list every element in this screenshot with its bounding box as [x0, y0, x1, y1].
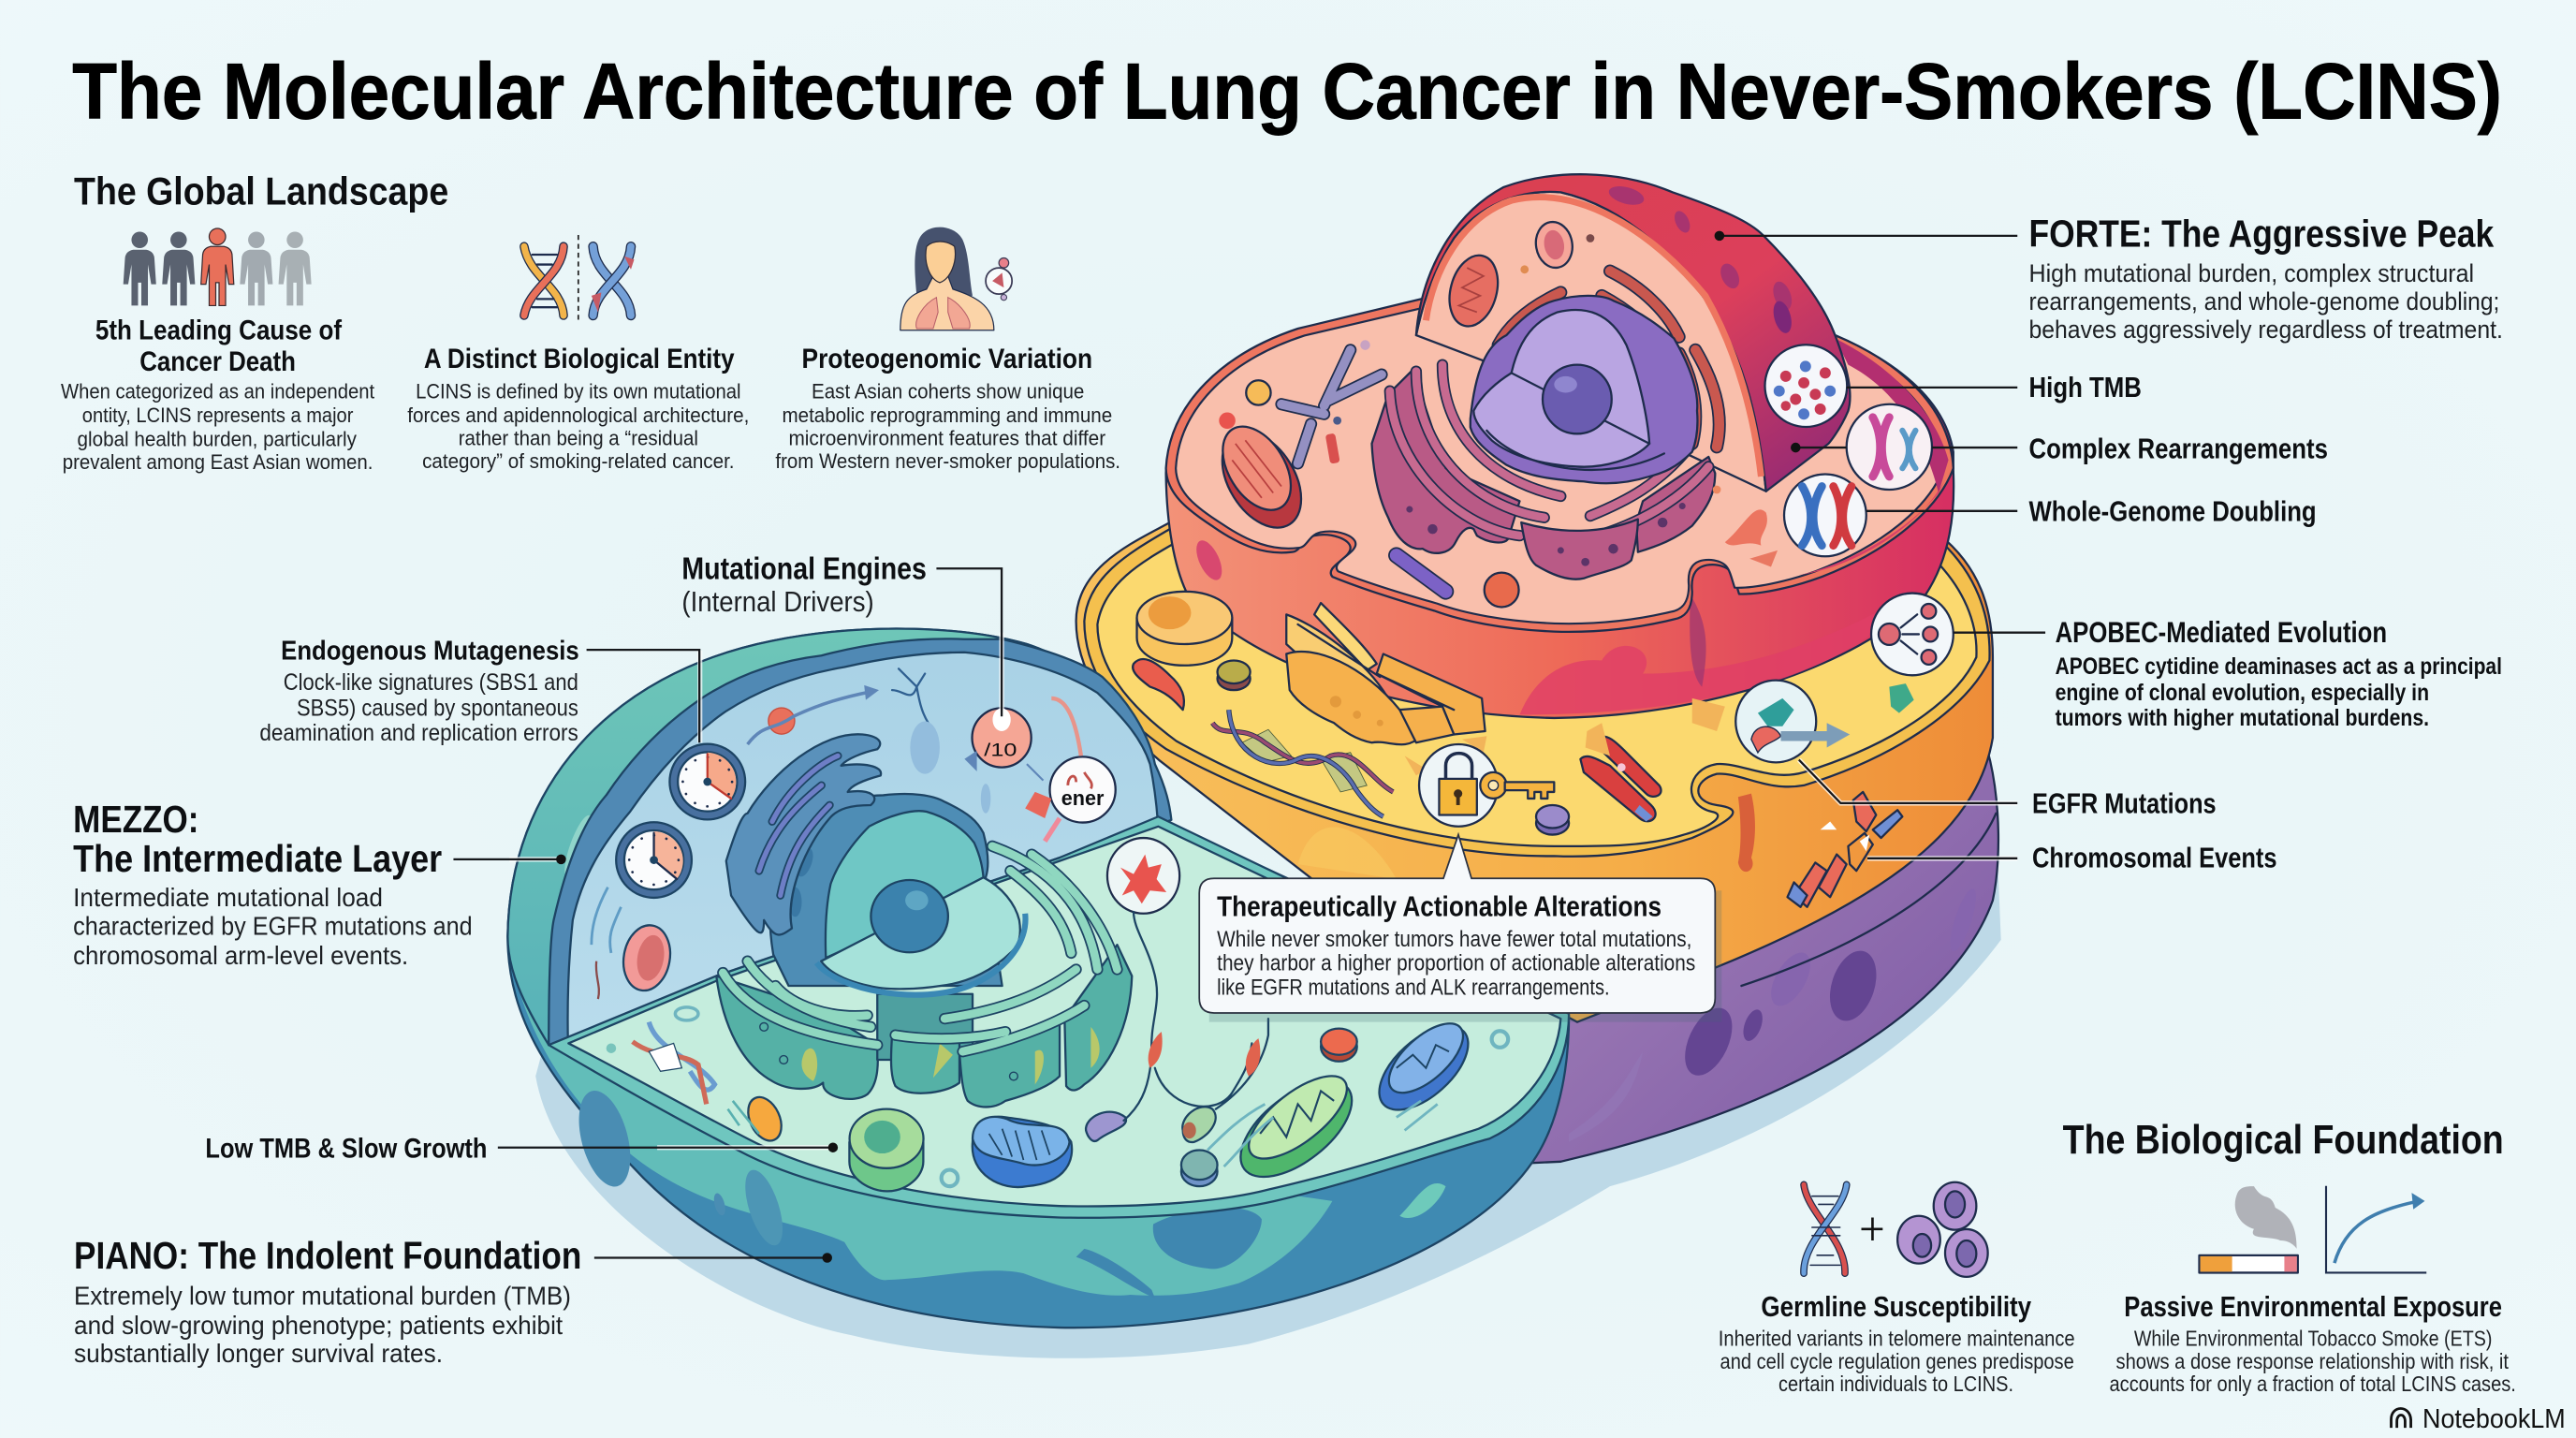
- bubble: high TMB: [1764, 345, 1847, 427]
- text: passive exposure body: While Environmental Tobacco Smoke (ETS): [2134, 1326, 2492, 1350]
- text: germline body: and cell cycle regulation genes predispose: [1720, 1349, 2074, 1373]
- red cell side: [1166, 335, 1954, 718]
- dome back wall: [1416, 192, 1766, 492]
- bubble: APOBEC clonal evolution: [1871, 594, 1954, 675]
- leader: PIANO: [594, 1253, 832, 1263]
- leader: Whole-Genome Doubling: [1866, 510, 2017, 512]
- text: 5th leading cause body: global health burden, particularly: [78, 427, 357, 450]
- leader: MEZZO: [453, 855, 566, 864]
- icon: five people: [124, 228, 312, 305]
- dome inner blue ring: [549, 638, 1171, 1045]
- bubble: EGFR receptor: [1735, 681, 1850, 762]
- text: proteogenomic body: from Western never-smoker populations.: [775, 449, 1120, 473]
- bubble: complex rearrangements: [1847, 404, 1932, 490]
- label: APOBEC-Mediated Evolution: tumors with higher mutational burdens.: [2056, 706, 2429, 731]
- text: germline body: certain individuals to LCINS.: [1778, 1372, 2013, 1396]
- red cell top surface: [1166, 299, 1954, 632]
- label: Mutational Engines: (Internal Drivers): [681, 585, 874, 618]
- floor organelle: green vesicle: [849, 1109, 924, 1191]
- panel: the biological foundation: [1719, 1117, 2516, 1396]
- teal nucleus: [770, 794, 1025, 995]
- label: Endogenous Mutagenesis: Endogenous Mutagenesis: [281, 637, 579, 667]
- floor organelle: blue mitochondrion two: [1365, 1011, 1483, 1125]
- heading: 5th leading cause of cancer death: [95, 315, 342, 377]
- heading: the global landscape: The Global Landscape: [74, 169, 448, 213]
- text: proteogenomic body: [775, 380, 1120, 473]
- leader: FORTE: [1715, 231, 2017, 241]
- item: germline susceptibility: [1719, 1182, 2075, 1396]
- label: APOBEC-Mediated Evolution: APOBEC-Mediated Evolution: [2056, 615, 2387, 649]
- blue rough ER: [726, 734, 881, 934]
- item: passive environmental exposure: [2110, 1186, 2516, 1396]
- label: MEZZO: MEZZO:: [73, 798, 198, 841]
- label: MEZZO: [73, 798, 473, 970]
- text: distinct entity body: rather than being a “residual: [459, 427, 698, 450]
- leader: EGFR Mutations: [1799, 760, 2017, 803]
- leader: Endogenous Mutagenesis: [587, 650, 700, 742]
- label: PIANO: PIANO: The Indolent Foundation: [74, 1234, 581, 1277]
- ener circle: [1025, 698, 1116, 842]
- callout: therapeutically actionable alterations: While never smoker tumors have fewer total mutations,: [1217, 928, 1691, 952]
- organelle: red tube and olive disc: [1133, 659, 1251, 710]
- callout: therapeutically actionable alterations: they harbor a higher proportion of actionable alterations: [1217, 952, 1695, 976]
- pink engine circle: [966, 708, 1044, 781]
- organelle: DNA helix: [1212, 710, 1393, 816]
- organelle: yellow vesicle: [1137, 592, 1232, 666]
- floor organelles: DNA and capsule: [607, 1007, 788, 1146]
- label: MEZZO: characterized by EGFR mutations and: [73, 912, 473, 941]
- organelle: grey chromosome: [1246, 340, 1382, 464]
- leader: High TMB: [1847, 387, 2017, 389]
- icon: DNA plus cells: [1804, 1182, 1988, 1277]
- text: proteogenomic body: East Asian coherts show unique: [812, 380, 1084, 404]
- floor organelles: discs, rings and fibres: [942, 912, 1508, 1186]
- heading: 5th leading cause of cancer death: Cancer Death: [139, 346, 296, 377]
- text: proteogenomic body: microenvironment features that differ: [788, 427, 1105, 450]
- callout: therapeutically actionable alterations: [1199, 835, 1721, 1022]
- label: Complex Rearrangements: Complex Rearrangements: [2029, 432, 2328, 464]
- organelles on the yellow surface, in front of the red cell: [1133, 592, 1914, 835]
- callout: therapeutically actionable alterations: Therapeutically Actionable Alterations: [1217, 890, 1661, 923]
- label: Mutational Engines: Mutational Engines: [681, 552, 927, 587]
- layer: teal PIANO / MEZZO cell: [507, 628, 1569, 1328]
- bubble: lock and key: [1419, 744, 1554, 827]
- teal ER gills: [723, 846, 1117, 1051]
- leader: Chromosomal Events: [1867, 857, 2017, 859]
- clock one: [669, 744, 745, 819]
- stat: distinct biological entity: [407, 235, 749, 473]
- text: proteogenomic body: metabolic reprogramming and immune: [782, 404, 1112, 427]
- label: Chromosomal Events: Chromosomal Events: [2032, 842, 2277, 874]
- label: APOBEC-Mediated Evolution: [2056, 615, 2502, 731]
- leader: Complex Rearrangements: [1791, 443, 2017, 452]
- leader lines: [453, 231, 2045, 1263]
- teal bowl: [507, 628, 1569, 1328]
- purple nucleus: [1471, 296, 1697, 483]
- icon: DNA versus chromosome: [524, 235, 634, 324]
- label: Whole-Genome Doubling: Whole-Genome Doubling: [2029, 494, 2317, 527]
- heading: distinct entity: A Distinct Biological Entity: [424, 344, 735, 374]
- teal dome outer shell: [507, 628, 1157, 1045]
- layer: yellow EGFR cell: [1076, 522, 1993, 1022]
- label: MEZZO: chromosomal arm-level events.: [73, 941, 408, 970]
- central illustration: three stacked cell layers: [453, 174, 2045, 1358]
- floor organelle: blue mitochondrion: [973, 1117, 1072, 1187]
- label: FORTE: [2029, 212, 2503, 344]
- text: 5th leading cause body: prevalent among East Asian women.: [63, 450, 373, 474]
- label: PIANO: Extremely low tumor mutational burden (TMB): [74, 1281, 571, 1310]
- label: PIANO: substantially longer survival rates.: [74, 1339, 443, 1368]
- label: Endogenous Mutagenesis: Clock-like signatures (SBS1 and: [284, 670, 578, 696]
- text: distinct entity body: forces and apidennological architecture,: [407, 404, 749, 427]
- label: PIANO: [74, 1234, 581, 1368]
- logo: NotebookLM: NotebookLM: [2422, 1404, 2566, 1434]
- floor organelle: green mitochondrion: [1224, 1062, 1368, 1196]
- text: germline body: Inherited variants in telomere maintenance: [1719, 1326, 2075, 1350]
- dome interior organelles: [592, 668, 990, 999]
- label: Mutational Engines: [681, 552, 927, 618]
- floor rim: [549, 816, 1569, 1218]
- label: APOBEC-Mediated Evolution: engine of clonal evolution, especially in: [2056, 681, 2429, 706]
- text: passive exposure body: [2110, 1326, 2516, 1396]
- label: APOBEC-Mediated Evolution: APOBEC cytidine deaminases act as a principal: [2056, 654, 2502, 680]
- heading: proteogenomic variation: Proteogenomic Variation: [802, 344, 1092, 374]
- organelle: red chromosome: [1580, 737, 1661, 822]
- stalk and side details: [1738, 794, 1755, 872]
- dome inner wall: [568, 653, 1158, 1042]
- drop shadow under cells: [535, 822, 2001, 1358]
- heading: 5th leading cause of cancer death: 5th Leading Cause of: [95, 315, 342, 345]
- heading: passive environmental exposure: Passive Environmental Exposure: [2124, 1290, 2502, 1323]
- text: distinct entity body: LCINS is defined by its own mutational: [416, 380, 741, 404]
- floor surface: [568, 827, 1560, 1206]
- bubble: red mutated cell: [1107, 838, 1179, 914]
- label: High TMB: High TMB: [2029, 371, 2142, 404]
- organelle: golgi stack: [1286, 603, 1486, 744]
- layer: purple base: [1525, 720, 1998, 1164]
- label: Endogenous Mutagenesis: SBS5) caused by spontaneous: [297, 696, 578, 721]
- text: 5th leading cause body: ontity, LCINS represents a major: [82, 404, 353, 427]
- heading: the biological foundation: The Biological Foundation: [2063, 1117, 2504, 1163]
- text: passive exposure body: accounts for only a fraction of total LCINS cases.: [2110, 1372, 2516, 1396]
- label: Low TMB and Slow Growth: Low TMB & Slow Growth: [205, 1133, 487, 1164]
- heading: germline susceptibility: Germline Susceptibility: [1761, 1290, 2031, 1323]
- front ER lobe: [1521, 520, 1638, 580]
- label: MEZZO: Intermediate mutational load: [73, 883, 383, 912]
- organelle: small blobs: [1405, 683, 1914, 835]
- text: passive exposure body: shows a dose response relationship with risk, it: [2116, 1349, 2510, 1373]
- label: Endogenous Mutagenesis: [259, 637, 579, 746]
- label: MEZZO: The Intermediate Layer: [73, 837, 442, 880]
- text: 5th leading cause body: When categorized as an independent: [61, 380, 374, 404]
- layer: red FORTE cell: [1166, 174, 1954, 718]
- label: FORTE: behaves aggressively regardless of treatment.: [2029, 315, 2503, 344]
- organelle: capsule, disc and blobs: [1219, 413, 1778, 607]
- callout: therapeutically actionable alterations: like EGFR mutations and ALK rearrangements.: [1217, 976, 1610, 1001]
- ener circle: ener: [1061, 786, 1105, 810]
- leader: APOBEC: [1954, 632, 2045, 634]
- text: distinct entity body: category” of smoking-related cancer.: [422, 449, 735, 473]
- dome shell: [1416, 174, 1850, 492]
- text: germline body: [1719, 1326, 2075, 1396]
- organelle: red cell mitochondrion: [1206, 415, 1317, 542]
- organelle: chromosomal fragments: [1788, 792, 1902, 907]
- label: PIANO: and slow-growing phenotype; patients exhibit: [74, 1311, 563, 1340]
- bubble: whole-genome doubling: [1784, 475, 1866, 556]
- organelle: dome mitochondrion and oval: [1442, 219, 1594, 331]
- pink engine circle: /10: [984, 741, 1017, 760]
- leader: Low TMB: [498, 1142, 838, 1152]
- text: 5th leading cause body: [61, 380, 374, 474]
- label: EGFR Mutations: EGFR Mutations: [2032, 787, 2217, 820]
- text: distinct entity body: [407, 380, 749, 473]
- ER lower mass: [1372, 370, 1715, 553]
- label: FORTE: FORTE: The Aggressive Peak: [2029, 212, 2495, 255]
- stat: 5th leading cause: [61, 228, 374, 474]
- stat: proteogenomic variation: [775, 227, 1120, 473]
- label: Endogenous Mutagenesis: deamination and replication errors: [259, 721, 578, 746]
- label: FORTE: rearrangements, and whole-genome doubling;: [2029, 286, 2499, 315]
- icon: cigarette and dose response curve: [2200, 1186, 2426, 1272]
- clock two: [616, 822, 692, 898]
- icon: woman with lungs and molecule: [900, 227, 1012, 330]
- label: FORTE: High mutational burden, complex structural: [2029, 258, 2474, 287]
- panel: the global landscape: [61, 169, 1120, 474]
- leader: Mutational Engines: [936, 568, 1002, 716]
- teal ER lobes: [716, 945, 1132, 1107]
